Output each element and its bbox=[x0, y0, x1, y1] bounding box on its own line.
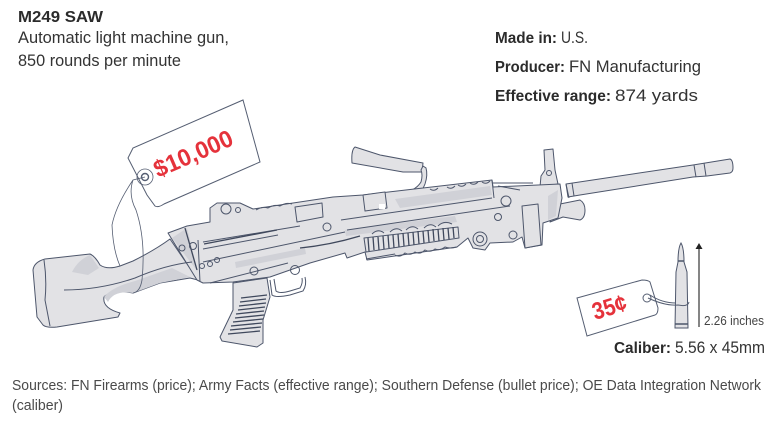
specifications text block: Made in: bbox=[495, 30, 557, 47]
caliber label bbox=[614, 339, 765, 357]
sources note: Sources: FN Firearms (price); Army Facts (effective range); Southern Defense (bullet price); OE Data Integration Network bbox=[12, 378, 762, 394]
gas block bbox=[522, 204, 541, 248]
gun shading bbox=[172, 186, 558, 272]
specifications text block: Effective range: bbox=[495, 88, 611, 105]
gun barrel bbox=[566, 159, 733, 197]
tag string bbox=[112, 177, 145, 293]
grip ribs bbox=[228, 295, 267, 334]
price: 35 cents: 35¢ bbox=[589, 290, 630, 326]
gun carry handle bbox=[352, 147, 427, 200]
rear sight blocks bbox=[295, 192, 387, 222]
specifications text block: U.S. bbox=[561, 29, 588, 47]
gun grip bbox=[220, 278, 270, 347]
heat shield scallops bbox=[366, 222, 457, 259]
price: $10,000: $10,000 bbox=[150, 125, 237, 183]
caliber label: 5.56 x 45mm bbox=[675, 339, 765, 357]
illustration: M249 machine gun bbox=[33, 147, 733, 347]
heading: weapon name and description: M249 SAW bbox=[18, 9, 104, 26]
sources note: (caliber) bbox=[12, 398, 63, 414]
label: bullet height: 2.26 inches bbox=[704, 313, 764, 328]
arrow: bullet height bbox=[696, 243, 702, 327]
specifications text block: FN Manufacturing bbox=[569, 58, 701, 76]
price tag: bullet bbox=[577, 280, 689, 336]
heading: weapon name and description: Automatic light machine gun, bbox=[18, 29, 229, 47]
heat shield ribs bbox=[364, 222, 459, 259]
heading: weapon name and description bbox=[18, 9, 229, 70]
price tag: gun bbox=[112, 100, 260, 293]
gun gas tube bbox=[550, 200, 585, 222]
trigger guard bbox=[270, 277, 306, 296]
gun stock bbox=[33, 239, 198, 327]
specifications text block: Producer: bbox=[495, 59, 565, 76]
gun detail lines bbox=[44, 163, 706, 326]
specifications text block: 874 yards bbox=[615, 87, 698, 105]
caliber label: Caliber: bbox=[614, 340, 671, 357]
gun round fittings bbox=[179, 170, 552, 275]
gun receiver and handguard bbox=[168, 180, 562, 283]
specifications text block bbox=[495, 29, 701, 105]
sources note bbox=[12, 378, 762, 414]
illustration: bullet bbox=[675, 243, 688, 328]
tag string bbox=[648, 295, 689, 306]
heading: weapon name and description: 850 rounds per minute bbox=[18, 52, 181, 70]
stock shading bbox=[72, 255, 190, 302]
gun front sight bbox=[540, 149, 558, 187]
